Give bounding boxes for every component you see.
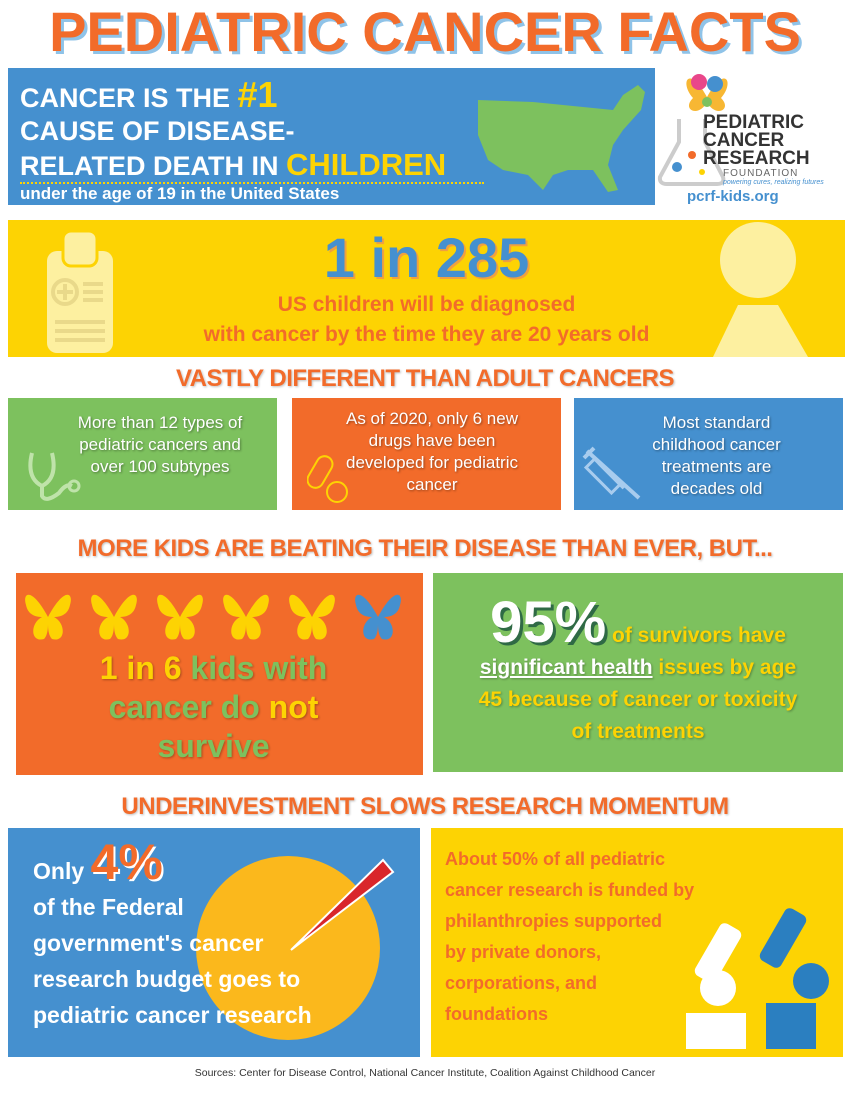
panel: philanthropy: philanthropies supported (445, 911, 662, 931)
heading: underinvestment: UNDERINVESTMENT SLOWS RESEARCH MOMENTUM (121, 793, 729, 820)
logo: FOUNDATION (723, 168, 798, 179)
panel: philanthropy: cancer research is funded by (445, 880, 694, 900)
card: types: More than 12 types of pediatric cancers and over 100 subtypes (78, 413, 242, 476)
big stat: 1 in 285 (324, 226, 529, 289)
icon: syringe (582, 446, 640, 500)
logo: RESEARCH (703, 148, 810, 169)
panel: 95%: 45 because of cancer or toxicity (479, 688, 797, 711)
icon: pills (307, 455, 348, 503)
stat text: with cancer by the time they are 20 years old (204, 323, 649, 346)
card: drugs (292, 398, 561, 510)
banner: #1 cause (8, 68, 655, 205)
panel: philanthropy: About 50% of all pediatric (445, 849, 665, 869)
headline text: RELATED DEATH IN CHILDREN (20, 147, 446, 182)
card: treatments: Most standard childhood cancer treatments are decades old (652, 413, 781, 498)
subtext: under the age of 19 in the United States (20, 184, 339, 203)
panel: 1 in 6 (16, 573, 423, 775)
card: types (8, 398, 277, 510)
panel: philanthropy: by private donors, (445, 942, 601, 962)
icon: clipboard (47, 232, 113, 353)
panel: philanthropy: corporations, and (445, 973, 597, 993)
panel: philanthropy: foundations (445, 1004, 548, 1024)
stat text: US children will be diagnosed (278, 293, 575, 316)
logo: pcrf-kids.org (687, 188, 779, 205)
panel: 1 in 285 (8, 220, 845, 357)
panel: 95%: significant health issues by age (480, 656, 796, 679)
heading: more kids: MORE KIDS ARE BEATING THEIR DISEASE THAN EVER, BUT... (78, 535, 772, 562)
heading: vastly different: VASTLY DIFFERENT THAN ADULT CANCERS (176, 365, 674, 392)
panel: philanthropy (431, 828, 843, 1057)
map of US (478, 85, 645, 192)
pie chart (196, 856, 394, 1040)
stat text (204, 293, 649, 346)
icon: stethoscope (28, 452, 80, 501)
panel: 1 in 6: cancer do not (109, 689, 318, 725)
panel: 4%: of the Federal (33, 894, 184, 920)
logo: powering cures, realizing futures (723, 179, 824, 186)
icon: microscopes (686, 908, 829, 1049)
panel: 1 in 6: 1 in 6 kids with (100, 650, 327, 686)
headline text: CAUSE OF DISEASE- (20, 116, 295, 146)
panel: 4%: research budget goes to (33, 966, 300, 992)
headline text (20, 74, 446, 182)
panel: 4% (8, 828, 420, 1057)
icon: butterflies (25, 594, 401, 640)
panel: 4%: government's cancer (33, 930, 263, 956)
panel: 95%: of treatments (571, 720, 705, 743)
panel: 4%: pediatric cancer research (33, 1002, 312, 1028)
card: treatments (574, 398, 843, 510)
logo: PEDIATRIC (703, 112, 804, 133)
logo: CANCER (703, 130, 784, 151)
card: drugs: As of 2020, only 6 new drugs have been developed for pediatric cancer (346, 409, 518, 494)
panel: 4%: Only 4% (33, 834, 163, 890)
sources: Sources: Center for Disease Control, National Cancer Institute, Coalition Against Childhood Cancer (195, 1067, 655, 1079)
title: PEDIATRIC CANCER FACTS (49, 0, 801, 63)
logo (658, 74, 824, 205)
icon: child (713, 222, 808, 357)
panel: 95% (433, 573, 843, 772)
panel: 95%: 95% of survivors have (490, 590, 786, 655)
panel: 1 in 6: survive (157, 728, 270, 764)
headline text: CANCER IS THE #1 (20, 74, 278, 115)
